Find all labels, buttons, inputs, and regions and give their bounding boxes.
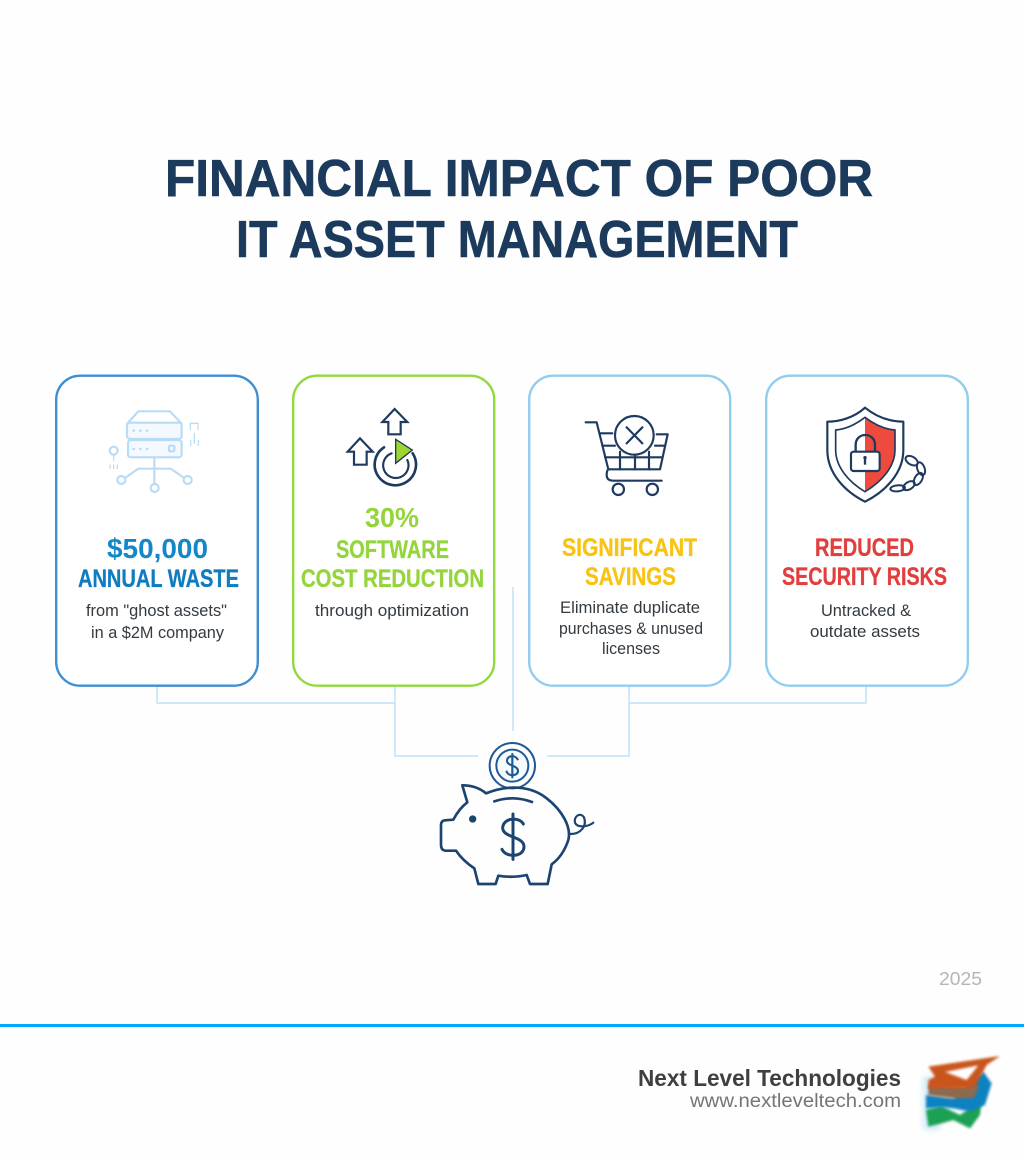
panel: annual waste: [56, 376, 258, 686]
text: through optimization: through optimization: [315, 601, 469, 620]
icon: shield with lock and chain: [827, 408, 927, 502]
icon: piggy bank with coin: [441, 743, 593, 884]
text: untracked assets: outdate assets: [810, 622, 920, 641]
footer: company name: [638, 1065, 901, 1112]
text: untracked assets: [810, 601, 920, 641]
text: eliminate duplicates: Eliminate duplicate: [560, 598, 700, 617]
stat: 30%: 30%: [365, 502, 419, 533]
heading: reduced security risks: SECURITY RISKS: [782, 563, 947, 591]
icon: growth arrows and target: [348, 409, 416, 485]
text: eliminate duplicates: licenses: [602, 639, 660, 658]
icon: server network: [110, 411, 198, 492]
heading: software cost reduction: [301, 536, 484, 593]
heading: annual waste: ANNUAL WASTE: [78, 565, 239, 593]
heading: reduced security risks: [782, 534, 947, 591]
year label: 2025: [939, 969, 982, 989]
heading: software cost reduction: COST REDUCTION: [301, 565, 484, 593]
heading: significant savings: [562, 534, 697, 591]
panel: significant savings: [529, 376, 730, 686]
heading: significant savings: SIGNIFICANT: [562, 534, 697, 562]
text: ghost assets: [86, 601, 227, 642]
heading: significant savings: SAVINGS: [585, 563, 676, 591]
connector lines: [157, 587, 866, 756]
panel: software cost reduction: [293, 376, 494, 686]
text: untracked assets: Untracked &: [821, 601, 912, 620]
heading: reduced security risks: REDUCED: [815, 534, 914, 562]
panel: reduced security risks: [766, 376, 968, 686]
footer: company name: Next Level Technologies: [638, 1065, 901, 1091]
heading: software cost reduction: SOFTWARE: [336, 536, 449, 564]
icon: coin: [490, 743, 535, 788]
icon: company logo: [923, 1056, 1000, 1130]
title: [165, 150, 873, 269]
text: eliminate duplicates: [559, 598, 703, 658]
text: eliminate duplicates: purchases & unused: [559, 619, 703, 638]
footer: company name: www.nextleveltech.com: [689, 1091, 901, 1112]
title: FINANCIAL IMPACT OF POOR: [165, 150, 873, 208]
footer rule: [0, 1024, 1024, 1027]
title: IT ASSET MANAGEMENT: [236, 211, 798, 269]
text: ghost assets: in a $2M company: [91, 623, 224, 642]
text: ghost assets: from "ghost assets": [86, 601, 227, 620]
icon: shopping cart with x: [586, 416, 668, 495]
stat: $50,000: $50,000: [107, 533, 208, 564]
